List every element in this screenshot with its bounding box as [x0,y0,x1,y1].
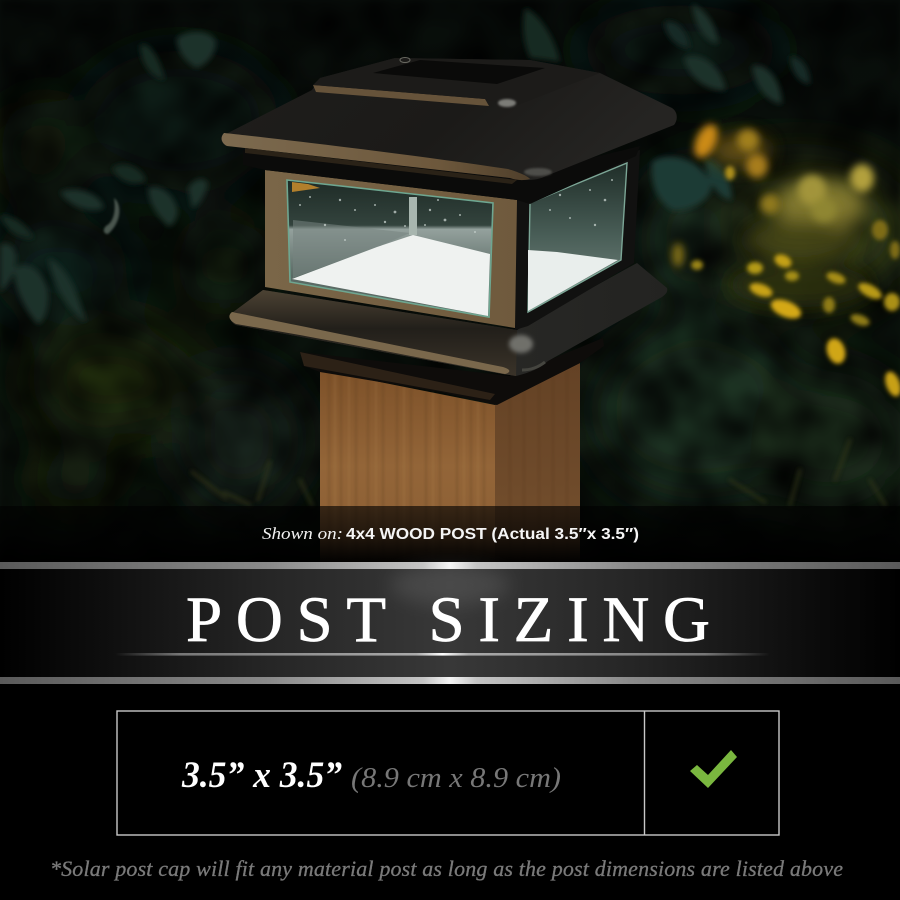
collar bronze trim [300,352,495,400]
solar post cap [221,58,677,405]
sizing table [117,711,779,835]
flower haze [710,134,870,307]
caption strip: 4x4 WOOD POST (Actual 3.5″x 3.5″) [346,526,639,543]
caption strip [0,506,900,562]
cap collar under the base [300,338,604,405]
mottled depth-of-field texture [0,0,900,562]
background leaves, left [0,32,216,324]
title: POST SIZING [186,584,710,656]
caption text: Shown on: [262,524,343,543]
grass blades [192,440,885,505]
right glass window [528,163,627,312]
yellow flowers [672,120,874,267]
photo background: blurred garden foliage [0,0,900,562]
roof of cap [221,58,677,204]
dark rear frame [515,150,640,330]
background leaves, right [523,4,810,210]
size in inches: 3.5” x 3.5” [181,755,342,796]
front glass window [287,180,493,317]
footnote: *Solar post cap will fit any material post as long as the post dimensions are listed above [50,856,843,881]
icon: green check mark [690,750,737,788]
size in centimetres: (8.9 cm x 8.9 cm) [351,762,561,794]
title banner [0,562,900,684]
cap base [229,263,667,376]
front bronze frame [265,170,517,328]
wooden post [320,363,580,562]
